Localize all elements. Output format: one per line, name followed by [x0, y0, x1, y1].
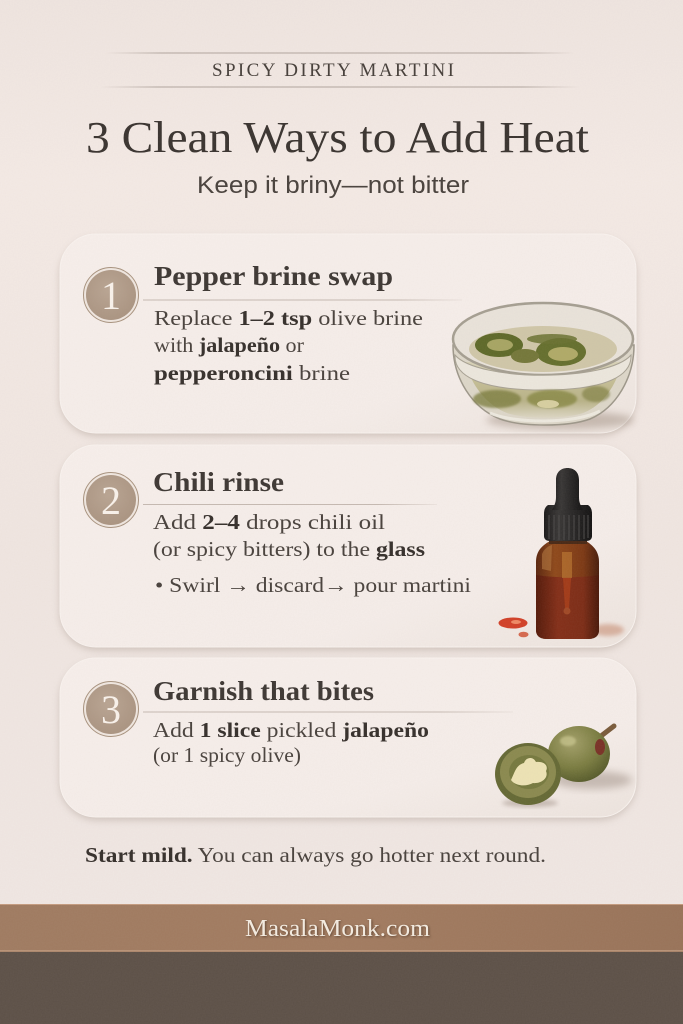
body text: Add 2–4 drops chili oil — [153, 510, 385, 534]
number badge 2: 2 — [101, 478, 121, 523]
number badge 3: 3 — [101, 687, 121, 732]
website name: MasalaMonk.com — [245, 916, 430, 942]
title: 3 Clean Ways to Add Heat — [86, 113, 589, 162]
number badge 3 — [84, 682, 138, 736]
body text: pepperoncini brine — [154, 361, 350, 385]
icon: glass bowl of pickled jalapeños — [453, 303, 634, 429]
icon: pickled jalapeño slice and olive — [495, 726, 632, 807]
body text — [153, 718, 429, 767]
number badge 1: 1 — [101, 273, 121, 318]
number badge 1 — [84, 268, 138, 322]
oil drops — [498, 618, 528, 637]
number badge 2 — [84, 472, 138, 528]
heading: Garnish that bites — [153, 675, 374, 706]
body text: (or spicy bitters) to the glass — [153, 537, 425, 561]
panel: garnish that bites — [60, 658, 636, 820]
heading: Chili rinse — [153, 466, 284, 497]
panel: chili rinse — [60, 445, 636, 650]
kicker: SPICY DIRTY MARTINI — [212, 60, 454, 81]
brand band — [0, 904, 683, 952]
icon: dropper bottle with chili oil — [498, 468, 624, 639]
subtitle: Keep it briny—not bitter — [197, 172, 469, 199]
body text — [154, 306, 423, 385]
panel: pepper brine swap — [60, 234, 636, 436]
closing tip: Start mild. You can always go hotter next round. — [85, 843, 546, 867]
body text: Replace 1–2 tsp olive brine — [154, 306, 423, 330]
body text: (or 1 spicy olive) — [153, 743, 301, 767]
header — [86, 52, 589, 199]
dark footer — [0, 952, 683, 1024]
heading: Pepper brine swap — [154, 260, 393, 291]
body text: with jalapeño or — [154, 333, 304, 357]
body text: Add 1 slice pickled jalapeño — [153, 718, 429, 742]
bullet step: • Swirl → discard→ pour martini — [155, 573, 471, 597]
body text — [153, 510, 425, 561]
